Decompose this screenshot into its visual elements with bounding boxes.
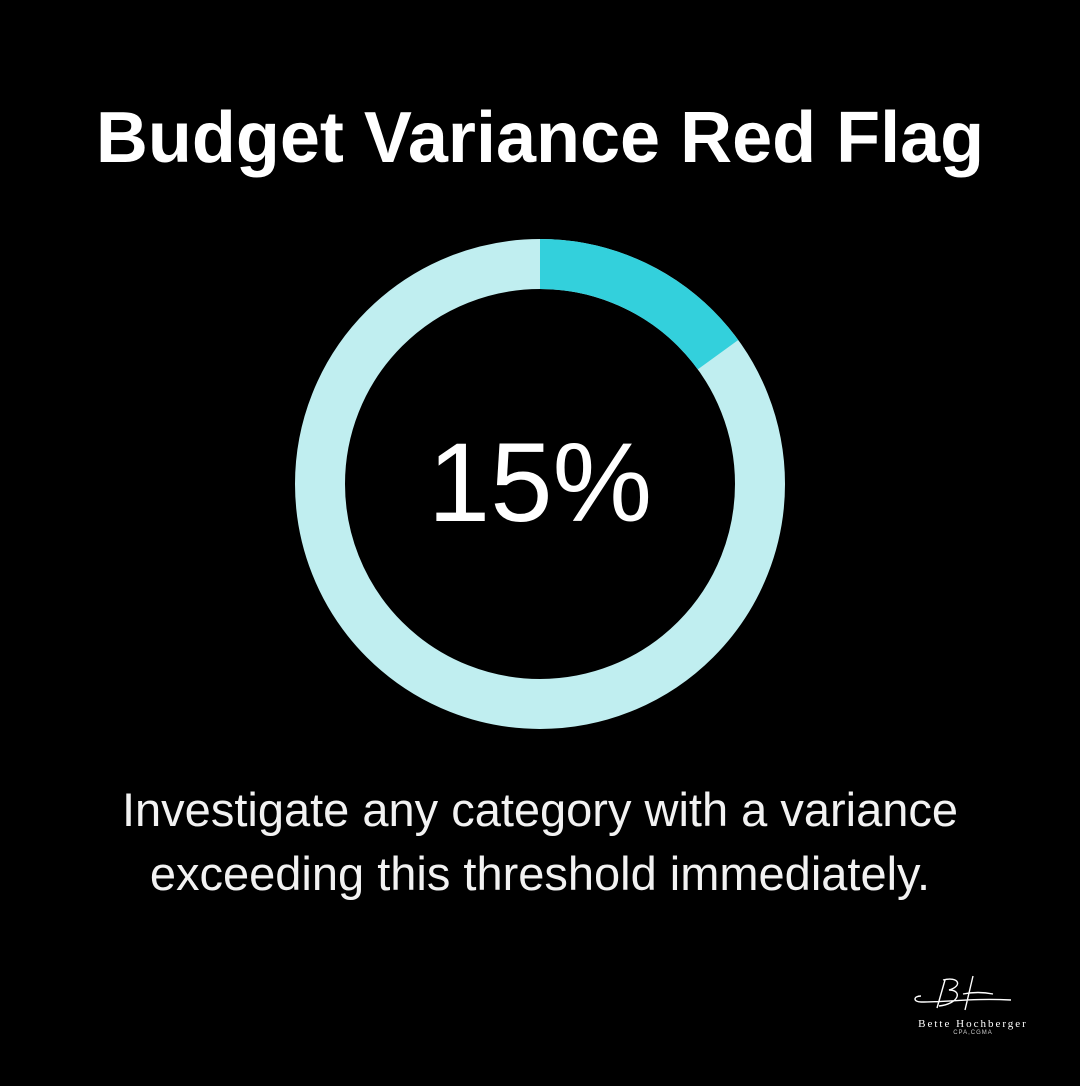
logo	[914, 976, 1028, 1036]
logo: Bette Hochberger	[918, 1018, 1028, 1030]
logo: CPA,CGMA	[953, 1030, 993, 1036]
caption: Investigate any category with a variance	[122, 783, 958, 836]
title: Budget Variance Red Flag	[96, 98, 984, 178]
caption: exceeding this threshold immediately.	[150, 847, 930, 900]
caption	[122, 783, 958, 900]
percentage value: 15%	[428, 420, 652, 545]
